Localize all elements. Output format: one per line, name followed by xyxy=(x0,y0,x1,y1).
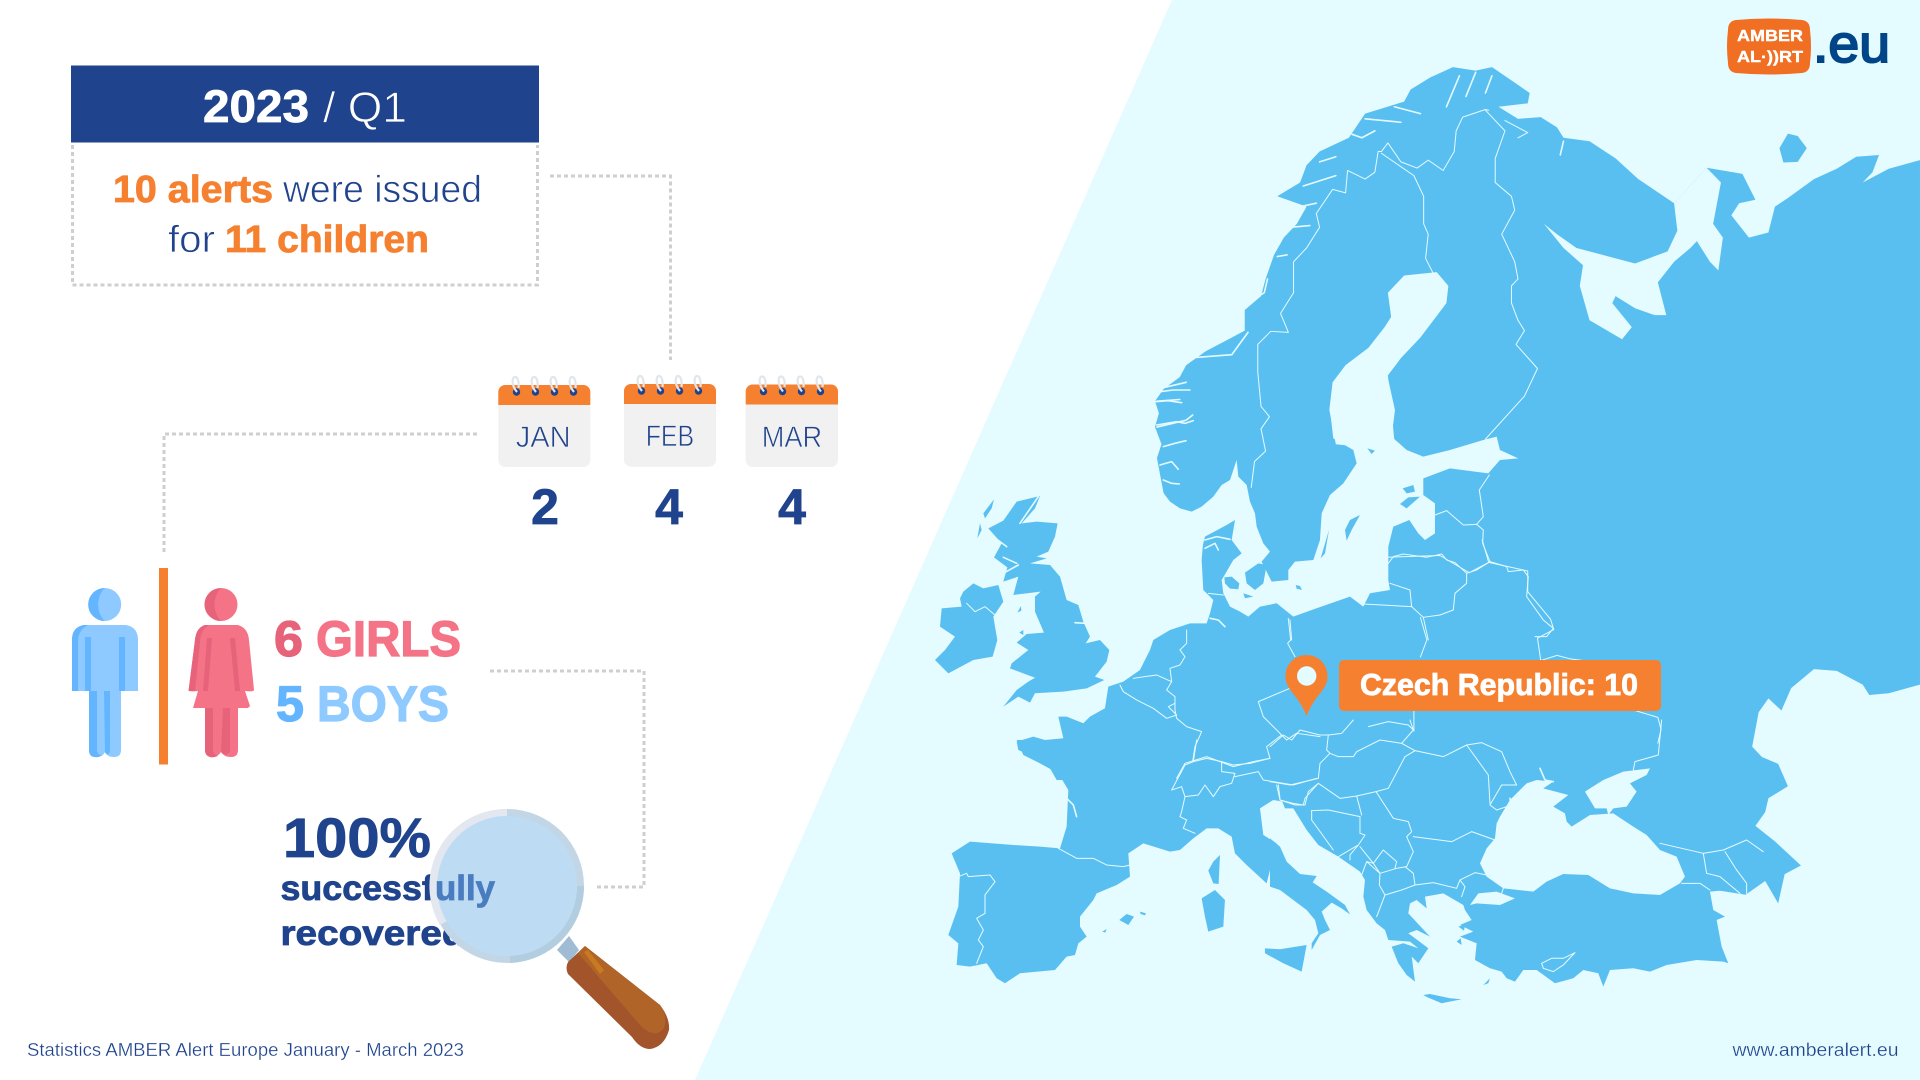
fjords and inlets xyxy=(993,72,1564,817)
calendar: February xyxy=(624,376,716,467)
logo: AMBER ALERT .eu: AL·))RT xyxy=(1737,49,1803,66)
text: alerts issued: 10 alerts xyxy=(113,169,273,211)
text: alerts issued: 11 children xyxy=(225,219,429,261)
connector: calendars to children xyxy=(164,434,477,552)
panel: light blue map background xyxy=(695,0,1920,1080)
calendar: January xyxy=(498,377,590,467)
calendar: February: FEB xyxy=(646,420,694,453)
land masses xyxy=(935,67,1920,1003)
text: alerts issued xyxy=(113,169,482,261)
text: website: www.amberalert.eu xyxy=(1731,1040,1898,1060)
text: source note: Statistics AMBER Alert Europe January - March 2023 xyxy=(27,1040,464,1060)
text: alerts issued: for xyxy=(168,219,215,261)
heading bar: 2023 / Q1: 2023 xyxy=(203,81,309,132)
text: 5 boys: BOYS xyxy=(317,676,449,732)
text: 6 girls: 6 xyxy=(274,611,303,667)
connector: children to recovered xyxy=(490,671,644,887)
seas xyxy=(1150,168,1723,905)
Baltic islands xyxy=(1224,448,1420,598)
logo: AMBER ALERT .eu: .eu xyxy=(1813,15,1890,74)
heading bar: 2023 / Q1 xyxy=(71,66,539,142)
number: February alerts: 4 xyxy=(655,479,683,535)
divider bar xyxy=(159,568,168,764)
text: 100% successfully recovered: successfully xyxy=(280,869,496,908)
panel: alerts summary dotted box xyxy=(72,145,538,285)
calendar: March xyxy=(746,376,838,467)
icon: map pin xyxy=(1285,655,1328,716)
number: March alerts: 4 xyxy=(778,479,806,535)
map: Europe xyxy=(935,67,1920,1003)
icon: magnifying glass xyxy=(429,809,669,1049)
text: 6 girls: GIRLS xyxy=(316,611,461,667)
callout: Czech Republic count: Czech Republic: 10 xyxy=(1360,667,1638,702)
text: 100% successfully recovered: 100% xyxy=(283,806,431,869)
country borders xyxy=(958,110,1763,972)
text: alerts issued: were issued xyxy=(282,169,482,211)
heading bar: 2023 / Q1: / Q1 xyxy=(323,84,407,132)
text: 5 boys: 5 xyxy=(276,676,304,732)
number: January alerts: 2 xyxy=(531,479,559,535)
text: 100% successfully recovered xyxy=(280,806,496,953)
text: 100% successfully recovered: recovered xyxy=(280,914,466,953)
logo: AMBER ALERT .eu: AMBER xyxy=(1737,28,1803,45)
icon: magnifying glass: ully xyxy=(435,869,496,908)
callout: Czech Republic count xyxy=(1339,660,1661,711)
connector: summary to calendars xyxy=(550,176,670,360)
calendar: January: JAN xyxy=(516,421,571,454)
icon: boy figure xyxy=(72,588,138,757)
icon: girl figure xyxy=(189,588,254,757)
calendar: March: MAR xyxy=(762,421,822,454)
logo: AMBER ALERT .eu xyxy=(1727,15,1890,74)
